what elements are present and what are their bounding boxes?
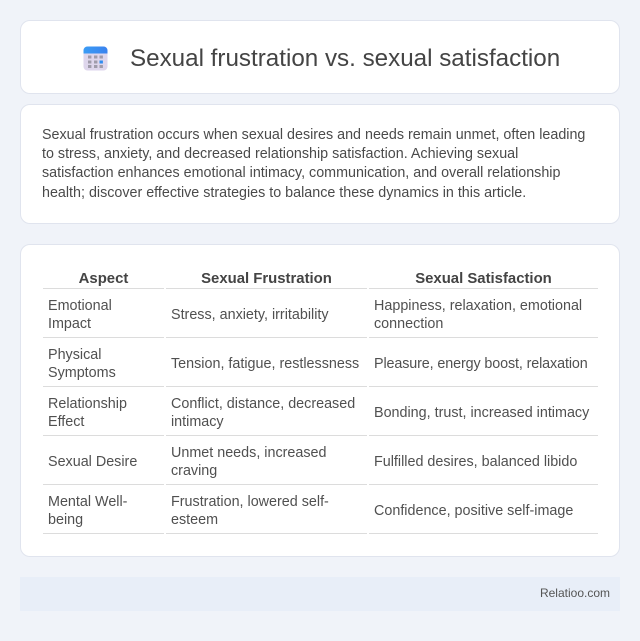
row: sexual desire: Unmet needs, increased [171, 445, 326, 461]
title: Sexual frustration vs. sexual satisfaction [130, 45, 560, 72]
row: sexual desire: Sexual Desire [48, 454, 137, 470]
row: emotional impact: Emotional [48, 298, 112, 314]
row: mental well-being: esteem [171, 512, 218, 528]
row: relationship effect: intimacy [171, 414, 224, 430]
row: emotional impact [48, 298, 582, 332]
row: emotional impact: Stress, anxiety, irritability [171, 307, 329, 323]
row: relationship effect: Conflict, distance, decreased [171, 396, 355, 412]
row: sexual desire [48, 445, 577, 479]
footer source: Relatioo.com [540, 586, 610, 600]
row: relationship effect: Bonding, trust, increased intimacy [374, 405, 589, 421]
intro text [42, 127, 585, 201]
row: relationship effect: Effect [48, 414, 84, 430]
intro text: health; discover effective strategies to balance these dynamics in this article. [42, 185, 526, 201]
footer [20, 577, 620, 611]
row: mental well-being: Mental Well- [48, 494, 127, 510]
row: physical symptoms: Tension, fatigue, restlessness [171, 356, 359, 372]
row: mental well-being: being [48, 512, 83, 528]
row: sexual desire: craving [171, 463, 217, 479]
intro text: satisfaction enhances emotional intimacy, communication, and overall relationship [42, 165, 560, 181]
row: mental well-being: Confidence, positive self-image [374, 503, 573, 519]
intro text: to stress, anxiety, and decreased relationship satisfaction. Achieving sexual [42, 146, 518, 162]
row: physical symptoms: Physical [48, 347, 101, 363]
table header: Sexual Frustration [201, 271, 332, 287]
panel: introduction [20, 104, 620, 224]
panel: comparison table [20, 244, 620, 557]
row: emotional impact: connection [374, 316, 443, 332]
row: emotional impact: Happiness, relaxation, emotional [374, 298, 582, 314]
intro text: Sexual frustration occurs when sexual desires and needs remain unmet, often leading [42, 127, 585, 143]
row: physical symptoms [48, 347, 588, 381]
row: relationship effect: Relationship [48, 396, 127, 412]
table header [79, 271, 552, 287]
row: emotional impact: Impact [48, 316, 91, 332]
panel: title card [20, 20, 620, 94]
table header: Aspect [79, 271, 128, 287]
row: mental well-being [48, 494, 573, 528]
row: physical symptoms: Pleasure, energy boost, relaxation [374, 356, 588, 372]
row: mental well-being: Frustration, lowered self- [171, 494, 329, 510]
row: sexual desire: Fulfilled desires, balanced libido [374, 454, 577, 470]
icon: calendar [84, 46, 108, 70]
row: relationship effect [48, 396, 590, 430]
row: physical symptoms: Symptoms [48, 365, 116, 381]
table header: Sexual Satisfaction [415, 271, 552, 287]
